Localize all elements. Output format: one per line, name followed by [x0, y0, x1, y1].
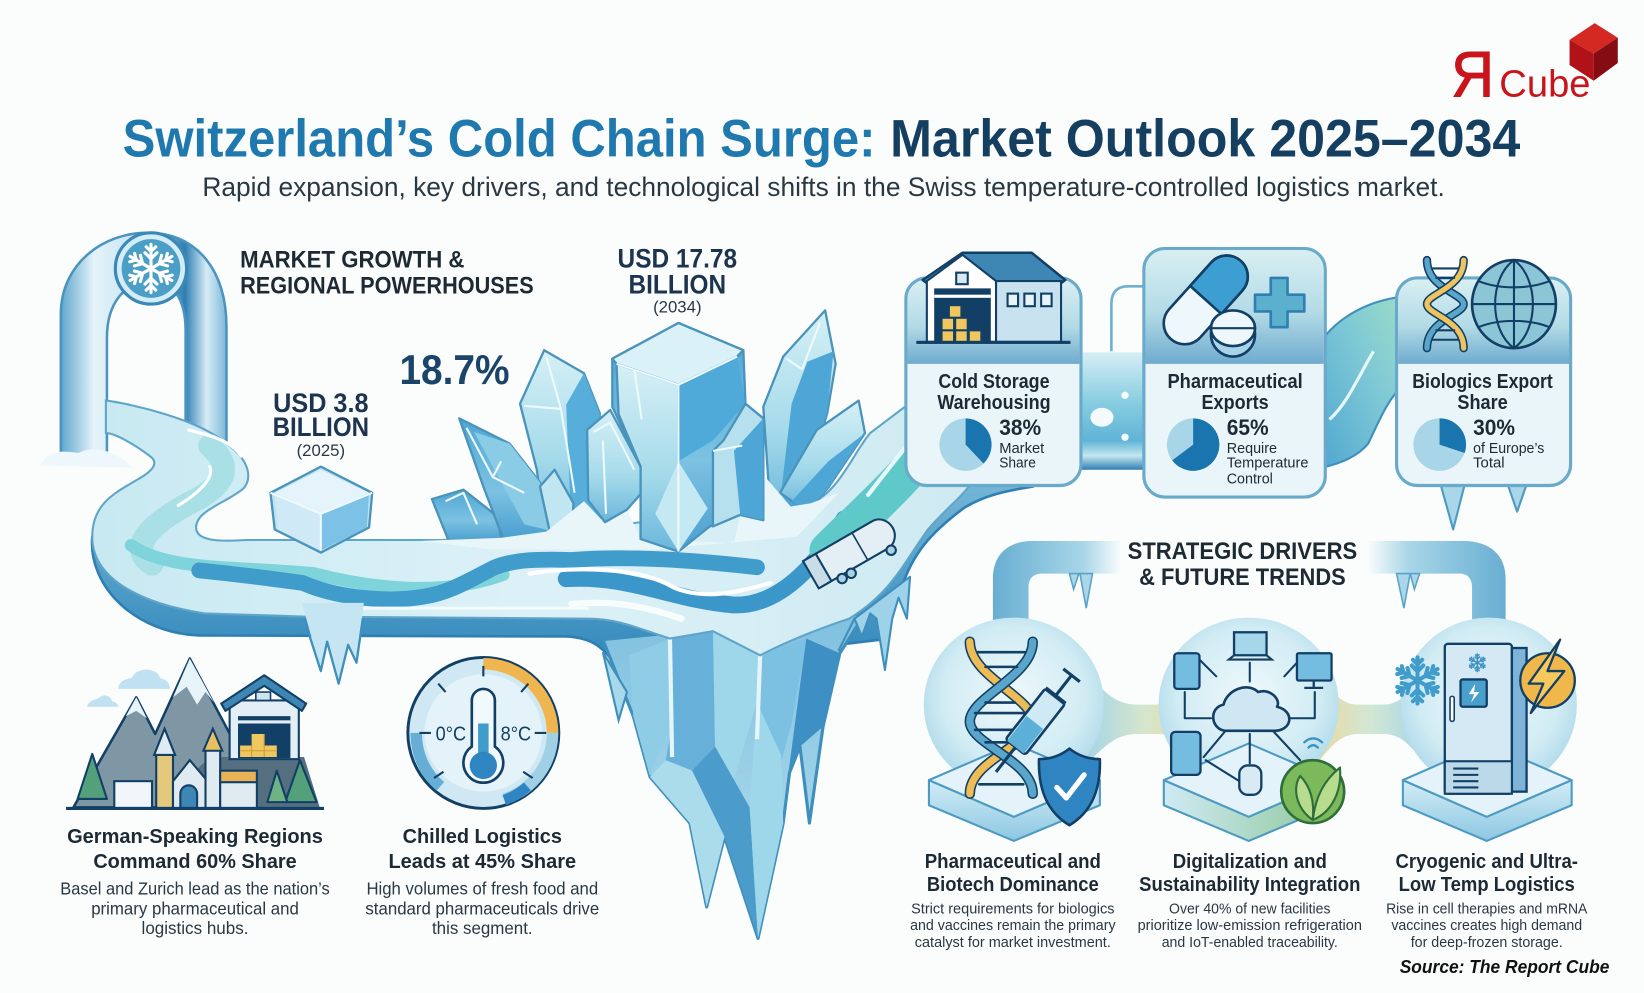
river flowing channels	[131, 430, 944, 619]
warehouse	[221, 675, 306, 759]
crystal: tall left	[520, 350, 600, 533]
text: digitalization and sustainability integration: Digitalization and	[1173, 851, 1327, 873]
crystal: small right	[780, 401, 865, 512]
pie chart: 38%	[939, 418, 992, 471]
stat: 65% require temperature control: Control	[1227, 470, 1273, 487]
truck on ice river	[803, 514, 904, 595]
labels: 0°C	[436, 723, 466, 745]
text: cryogenic and ultra-low temp logistics: for deep-frozen storage.	[1411, 934, 1563, 951]
text: pharmaceutical and biotech dominance: Pharmaceutical and	[925, 851, 1101, 873]
text: digitalization and sustainability integration: prioritize low-emission refrigeration	[1138, 917, 1362, 934]
network links	[1185, 661, 1315, 781]
icon: pill capsule, tablet and cross	[1155, 247, 1304, 357]
market growth heading: REGIONAL POWERHOUSES	[240, 273, 534, 299]
ice crystal cluster: USD 17.78 billion	[419, 310, 865, 552]
ice mound around crystals	[419, 477, 839, 549]
logo: RCube: Я	[1451, 38, 1494, 111]
icon: DNA helix	[970, 642, 1033, 794]
USD 17.78 billion label: (2034)	[653, 297, 702, 316]
crystal: side left of main	[587, 410, 642, 522]
strategic drivers heading: & FUTURE TRENDS	[1139, 564, 1346, 590]
text: chilled logistics: Chilled Logistics	[403, 825, 562, 848]
icicle: left of iceberg	[603, 652, 627, 720]
crystal: slanted left	[459, 418, 550, 539]
river ice surface	[92, 398, 971, 655]
stat: 30% of Europe's total: of Europe’s	[1473, 440, 1545, 457]
pipe: right connector	[1367, 541, 1506, 621]
stat: 38% market share	[999, 415, 1045, 472]
driver: pharma and biotech illustration	[929, 642, 1100, 841]
card: cold storage warehousing	[906, 253, 1081, 485]
text: cryogenic and ultra-low temp logistics	[1386, 851, 1588, 951]
stat: 65% require temperature control: Require	[1227, 440, 1277, 457]
card title: Exports	[1202, 392, 1269, 414]
river underside and base	[92, 419, 1033, 671]
source: Source: The Report Cube	[1400, 956, 1609, 977]
text: german-speaking regions: Command 60% Share	[93, 850, 297, 873]
text: cryogenic and ultra-low temp logistics: Low Temp Logistics	[1399, 874, 1575, 896]
iceberg below the river	[603, 577, 910, 938]
icon: sensor	[1239, 765, 1261, 795]
card title: Pharmaceutical	[1167, 371, 1303, 393]
USD 17.78 billion label	[618, 242, 737, 316]
pipe: left connector	[993, 541, 1122, 621]
text: chilled logistics: standard pharmaceuticals drive	[365, 898, 599, 918]
stat: 38% market share: Share	[999, 455, 1036, 472]
text: digitalization and sustainability integration: Over 40% of new facilities	[1169, 900, 1331, 917]
driver: cryogenic illustration	[1395, 640, 1575, 841]
icon: monitor	[1297, 653, 1332, 688]
thermometer	[463, 689, 503, 783]
card: pharmaceutical exports	[1144, 247, 1325, 497]
title: Switzerland’s Cold Chain Surge:	[123, 110, 875, 168]
platform	[1403, 743, 1572, 841]
connected frost background bubbles	[924, 618, 1577, 792]
text: cryogenic and ultra-low temp logistics: vaccines creates high demand	[1391, 917, 1582, 934]
text: german-speaking regions	[60, 825, 330, 938]
crystal: small front	[540, 470, 574, 535]
crystal: small left	[432, 490, 501, 541]
text: pharmaceutical and biotech dominance	[910, 851, 1116, 951]
platform	[929, 743, 1100, 841]
stat: 30% of Europe's total: 30%	[1473, 415, 1515, 440]
stat: 65% require temperature control	[1227, 415, 1308, 487]
pie chart: 65%	[1167, 418, 1219, 471]
crystal: main	[612, 323, 763, 552]
card title: Warehousing	[937, 392, 1051, 414]
stat: 38% market share: Market	[999, 440, 1045, 457]
card title: Cold Storage	[938, 371, 1050, 393]
icon: temperature gauge 0-8°C	[408, 657, 559, 808]
icon: phone top	[1174, 653, 1199, 689]
market growth heading	[240, 246, 534, 299]
icon: green leaf badge	[1281, 760, 1344, 823]
text: chilled logistics: this segment.	[432, 918, 533, 938]
USD 3.8 billion label: USD 3.8	[273, 387, 369, 418]
card title: Biologics Export	[1412, 371, 1553, 393]
market growth heading: MARKET GROWTH &	[240, 246, 464, 272]
text: german-speaking regions: logistics hubs.	[142, 918, 248, 938]
platform	[1164, 743, 1334, 841]
text: pharmaceutical and biotech dominance: Strict requirements for biologics	[911, 900, 1115, 917]
USD 3.8 billion label	[273, 387, 369, 460]
stat: 30% of Europe's total	[1473, 415, 1545, 472]
icon: snowflake	[1395, 657, 1440, 704]
USD 3.8 billion label: BILLION	[273, 411, 369, 442]
town buildings	[114, 781, 152, 808]
stat: 30% of Europe's total: Total	[1473, 455, 1505, 472]
text: chilled logistics	[365, 825, 599, 938]
text: german-speaking regions: primary pharmaceutical and	[91, 898, 299, 918]
icon: cloud	[1213, 687, 1289, 731]
icon: wifi	[1304, 738, 1322, 748]
USD 17.78 billion label: USD 17.78	[618, 242, 737, 273]
driver: digitalization illustration	[1164, 632, 1344, 841]
text: digitalization and sustainability integration: Sustainability Integration	[1139, 874, 1360, 896]
logo: RCube	[1451, 23, 1618, 111]
stat: 38% market share: 38%	[999, 415, 1041, 440]
text: cryogenic and ultra-low temp logistics: Rise in cell therapies and mRNA	[1386, 900, 1588, 917]
text: german-speaking regions: Basel and Zurich lead as the nation’s	[60, 878, 330, 898]
text: digitalization and sustainability integration	[1138, 851, 1362, 951]
text: pharmaceutical and biotech dominance: and vaccines remain the primary	[910, 917, 1116, 934]
text: digitalization and sustainability integration: and IoT-enabled traceability.	[1162, 934, 1338, 951]
text: german-speaking regions: German-Speaking Regions	[67, 825, 323, 848]
ice arch with snowflake medallion	[40, 233, 226, 468]
title: Market Outlook 2025–2034	[890, 110, 1520, 168]
icon: snowflake medallion	[115, 233, 187, 304]
icon: DNA and globe	[1427, 260, 1556, 348]
strategic drivers heading: STRATEGIC DRIVERS	[1128, 538, 1357, 564]
logo: RCube: Cube	[1499, 63, 1591, 105]
card title	[1167, 371, 1303, 414]
left tree	[78, 754, 107, 799]
icon: alpine village and warehouse	[66, 658, 324, 810]
icon: energy bolt	[1520, 640, 1575, 713]
icon: laptop	[1229, 632, 1272, 660]
growth rate 18.7%: 18.7%	[399, 346, 510, 393]
text: chilled logistics: High volumes of fresh food and	[366, 878, 598, 898]
strategic drivers heading	[1128, 538, 1357, 590]
card: biologics export share	[1397, 260, 1571, 530]
ice cube: USD 3.8 billion	[271, 467, 372, 553]
title	[123, 110, 1520, 168]
card title	[937, 371, 1051, 414]
USD 17.78 billion label: BILLION	[629, 269, 726, 300]
stat: 65% require temperature control: Temperature	[1227, 455, 1308, 472]
card title	[1412, 371, 1553, 414]
icicles under river	[302, 603, 364, 684]
river band continuing behind cards	[1078, 286, 1401, 470]
icicles: right of iceberg	[839, 577, 910, 670]
icon: syringe	[986, 668, 1081, 780]
crystal: tall right	[763, 310, 836, 514]
subtitle: Rapid expansion, key drivers, and technological shifts in the Swiss temperature-controlled logistics market.	[202, 171, 1445, 202]
stat: 65% require temperature control: 65%	[1227, 415, 1269, 440]
text: chilled logistics: Leads at 45% Share	[388, 850, 576, 873]
icon: shield	[1039, 749, 1100, 825]
icon: warehouse	[916, 253, 1070, 344]
icon: ultra-low freezer	[1445, 644, 1527, 794]
USD 3.8 billion label: (2025)	[297, 441, 345, 460]
card title: Share	[1457, 392, 1508, 414]
right trees	[285, 760, 317, 802]
icon: temperature gauge 0-8°C: 8°C	[501, 723, 531, 745]
icon: phone bottom	[1171, 732, 1200, 775]
text: pharmaceutical and biotech dominance: Biotech Dominance	[927, 874, 1099, 896]
text: pharmaceutical and biotech dominance: catalyst for market investment.	[915, 934, 1111, 951]
pie chart: 30%	[1413, 418, 1466, 471]
text: cryogenic and ultra-low temp logistics: Cryogenic and Ultra-	[1396, 851, 1578, 873]
